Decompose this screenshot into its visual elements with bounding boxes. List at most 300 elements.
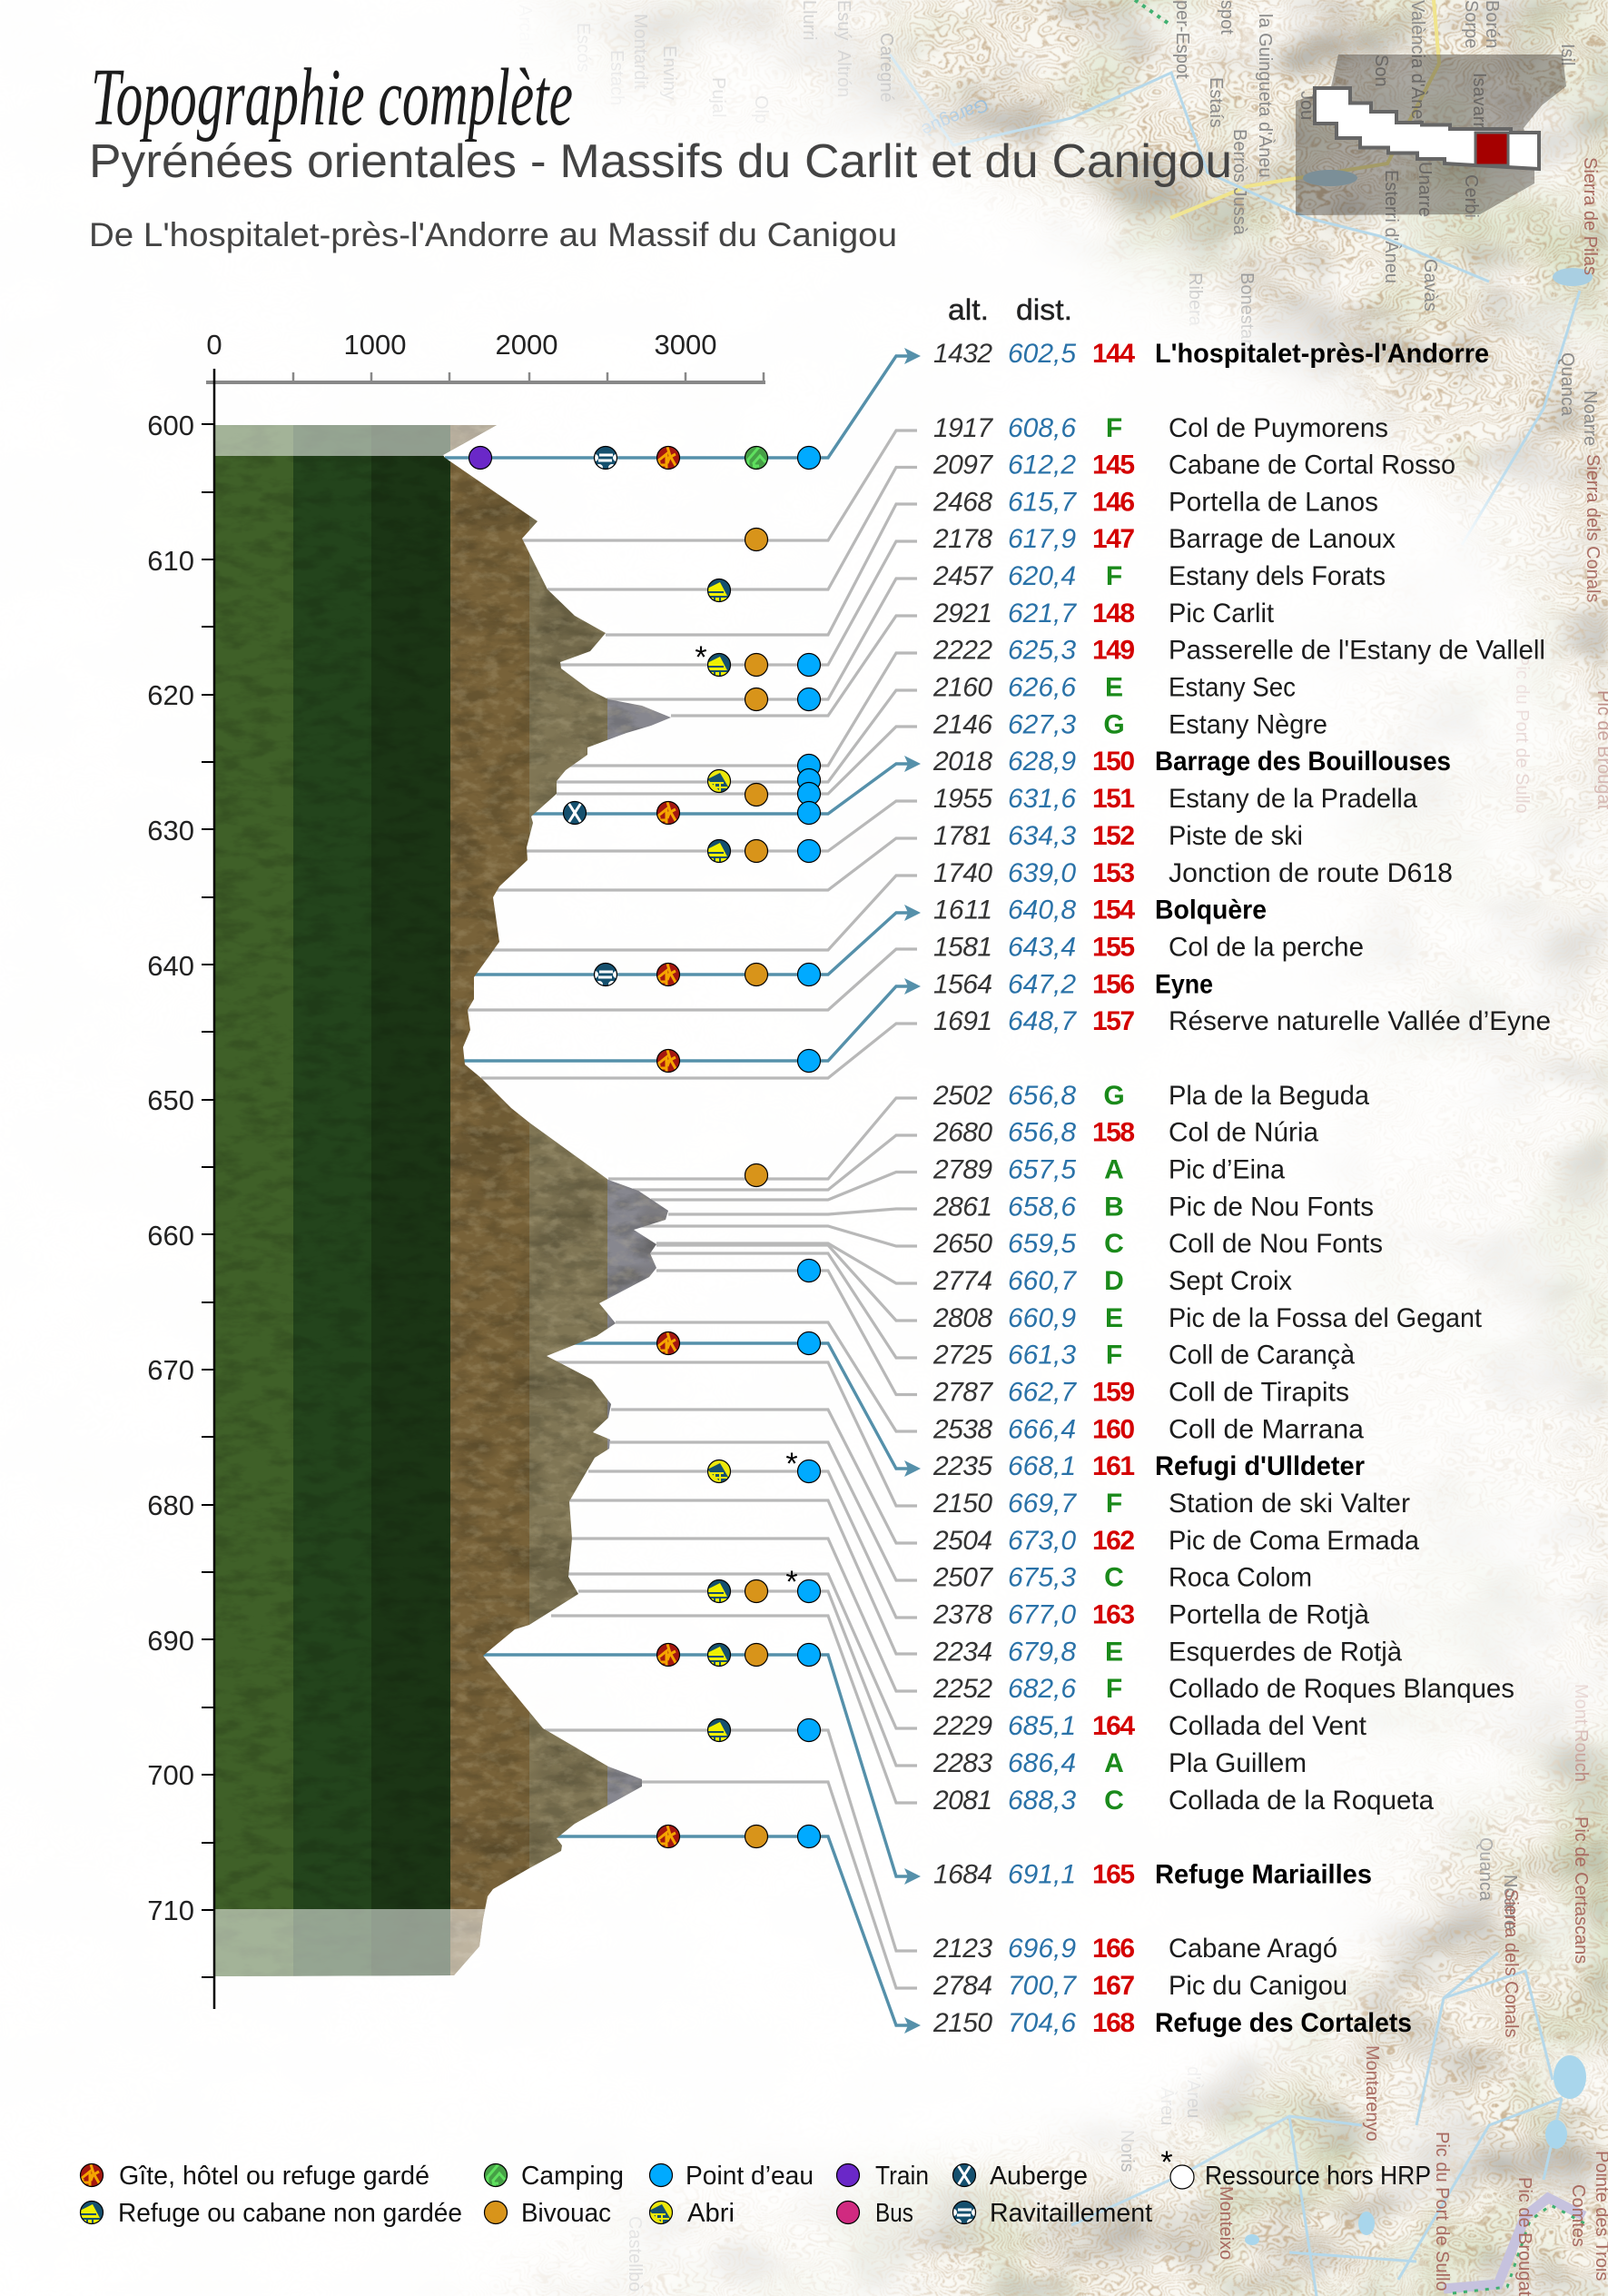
background topographic map: Borén [1482, 0, 1502, 48]
row: Cabane Aragó: 696,9 [1008, 1934, 1076, 1964]
resource icons on the profile lines [469, 447, 821, 1847]
row: Pic d'Eina: A [1104, 1155, 1124, 1184]
background topographic map: Monteixo [1216, 2186, 1236, 2260]
altitude axis [206, 329, 765, 382]
row: Pic de Coma Ermada: Pic de Coma Ermada [1169, 1526, 1419, 1556]
row: Portella de Rotjà: 2378 [932, 1600, 992, 1630]
row: L'hospitalet: 1432 [933, 339, 992, 369]
row: Coll de Carançà: F [1106, 1341, 1122, 1371]
row: Estany Nègre [932, 709, 1327, 739]
row: Col de la perche [933, 932, 1364, 962]
row: Refuge Mariailles: 691,1 [1008, 1859, 1076, 1889]
row: Piste de ski: 1781 [933, 821, 992, 851]
legend: train: Train [875, 2162, 929, 2191]
row: Collado de Roques Blanques: 682,6 [1008, 1674, 1076, 1704]
background topographic map: per-Espot [1172, 0, 1192, 79]
background topographic map: Caregné [876, 33, 896, 103]
background topographic map: Pic de Certascans [1571, 1816, 1591, 1964]
distance axis: 650 [147, 1084, 194, 1116]
row: Refuge des Cortalets: 704,6 [1008, 2008, 1076, 2038]
column headers: dist. [1016, 293, 1072, 326]
row: Coll de Marrana: 666,4 [1008, 1414, 1076, 1444]
row: Col de Puymorens [933, 413, 1388, 443]
distance axis: 680 [147, 1489, 194, 1521]
background topographic map: Escós [573, 23, 593, 72]
row: Bolquère: 154 [1092, 896, 1135, 925]
background topographic map: Esuý [834, 0, 853, 40]
row: Pla de la Beguda: Pla de la Beguda [1169, 1081, 1369, 1111]
row: Refuge Mariailles: 165 [1092, 1859, 1135, 1889]
row: Pic d'Eina: 657,5 [1008, 1155, 1076, 1184]
row: Roca Colom: 675,3 [1008, 1563, 1076, 1593]
row: Pic d'Eina: 2789 [932, 1155, 992, 1184]
row: Station de ski Valter: 2150 [932, 1489, 992, 1519]
row: Refugi d'Ulldeter [932, 1451, 1365, 1481]
row: Coll de Tirapits: 2787 [932, 1377, 993, 1408]
column headers [948, 293, 1072, 326]
section description: De L'hospitalet-près-l'Andorre au Massif du Canigou [89, 216, 897, 253]
row: Cabane de Cortal Rosso [932, 450, 1455, 480]
row: Coll de Nou Fonts [932, 1229, 1383, 1259]
row: Pla de la Beguda [932, 1081, 1369, 1111]
row: Coll de Carançà [932, 1341, 1355, 1371]
background topographic map: Noarre [1580, 391, 1600, 446]
row: Pic de la Fossa del Gegant: 660,9 [1008, 1303, 1076, 1333]
row: Estany de la Pradella: 151 [1092, 784, 1135, 814]
row: Refuge Mariailles: 1684 [933, 1859, 992, 1889]
row: Roca Colom: 2507 [932, 1563, 993, 1593]
row: Collada del Vent: Collada del Vent [1169, 1711, 1367, 1741]
background topographic map: Àreu [1157, 2087, 1178, 2125]
row: Eyne: Eyne [1155, 969, 1213, 999]
row: Portella de Lanos [932, 487, 1378, 517]
row: Cabane Aragó: 2123 [932, 1934, 992, 1964]
row: Pic Carlit: 2921 [932, 599, 992, 628]
background topographic map: la Guingueta d'Àneu [1255, 14, 1276, 178]
row: Estany Sec: 626,6 [1008, 673, 1076, 703]
row: Jonction de route D618: 153 [1092, 858, 1135, 888]
row: Portella de Lanos: 615,7 [1008, 487, 1077, 517]
legend: abri [649, 2199, 735, 2228]
row: Réserve naturelle: 157 [1092, 1006, 1135, 1036]
row: Esquerdes de Rotjà: Esquerdes de Rotjà [1169, 1637, 1402, 1667]
row: Refuge des Cortalets: 168 [1092, 2008, 1135, 2038]
row: Réserve naturelle: 1691 [933, 1006, 992, 1036]
row: Estany de la Pradella [933, 784, 1417, 814]
row: Refugi d'Ulldeter: 668,1 [1008, 1451, 1076, 1481]
distance axis: 670 [147, 1354, 194, 1386]
background topographic map: Castellbò [625, 2216, 645, 2291]
row: Pic de la Fossa del Gegant: Pic de la Fossa del Gegant [1169, 1303, 1483, 1333]
distance axis: 640 [147, 950, 194, 982]
background topographic map: Pic du Port de Sullo [1512, 654, 1532, 814]
row: Pic de la Fossa del Gegant: E [1105, 1303, 1123, 1333]
row: Pic Carlit: 148 [1092, 599, 1135, 628]
row: Pic de Nou Fonts: B [1104, 1192, 1124, 1222]
row: Roca Colom: Roca Colom [1169, 1563, 1312, 1593]
row: Pic d'Eina [932, 1155, 1285, 1184]
locator: route strip [1315, 88, 1539, 169]
row: Collado de Roques Blanques: F [1106, 1674, 1122, 1704]
subtitle: Pyrénées orientales - Massifs du Carlit et du Canigou [89, 135, 1232, 188]
legend: bus: Bus [875, 2199, 913, 2228]
row: Collada de la Roqueta: 2081 [932, 1786, 992, 1816]
row: Bolquère: 1611 [933, 896, 992, 925]
row: Barrage des Bouillouses: 150 [1092, 747, 1135, 777]
row: Refugi d'Ulldeter: Refugi d'Ulldeter [1155, 1451, 1365, 1481]
row: Cabane Aragó: 166 [1092, 1934, 1135, 1964]
row: Col de la perche: 1581 [933, 932, 992, 962]
row: Col de Puymorens: Col de Puymorens [1169, 413, 1388, 443]
row: Jonction de route D618: 1740 [933, 858, 992, 888]
row: Sept Croix: Sept Croix [1169, 1266, 1292, 1296]
altitude axis: 1000 [344, 329, 406, 361]
background topographic map: Estach [607, 50, 626, 105]
distance axis: 710 [147, 1895, 194, 1926]
title: Topographie complète [91, 53, 573, 143]
row: Esquerdes de Rotjà: 679,8 [1008, 1637, 1076, 1667]
row: Coll de Tirapits [932, 1377, 1349, 1408]
row: Pla Guillem [932, 1748, 1307, 1778]
legend: bivouac [485, 2199, 611, 2228]
row: Estany Sec: Estany Sec [1169, 673, 1296, 703]
row: Sept Croix: 2774 [932, 1266, 992, 1296]
elevation profile [214, 418, 695, 1989]
row: Bolquère: Bolquère [1155, 896, 1267, 925]
row: Roca Colom: C [1104, 1563, 1124, 1593]
background topographic map: Berròs Jussà [1229, 129, 1249, 236]
row: Refuge Mariailles: Refuge Mariailles [1155, 1859, 1372, 1889]
row: Pic de la Fossa del Gegant [932, 1303, 1483, 1333]
row: Collada del Vent: 164 [1092, 1711, 1135, 1741]
row: Estany Nègre: 627,3 [1008, 709, 1076, 739]
row: Portella de Rotjà [932, 1600, 1369, 1630]
row: Portella de Lanos: 2468 [932, 487, 992, 517]
row: Pla de la Beguda: 656,8 [1008, 1081, 1076, 1111]
background topographic map [496, 0, 1608, 2296]
row: Réserve naturelle: 648,7 [1008, 1006, 1077, 1036]
row: Pla de la Beguda: 2502 [932, 1081, 992, 1111]
row: Piste de ski: 634,3 [1008, 821, 1076, 851]
row: Pla Guillem: 686,4 [1008, 1748, 1076, 1778]
row: Cabane Aragó [932, 1934, 1337, 1964]
row: Collada de la Roqueta: Collada de la Roqueta [1169, 1786, 1434, 1816]
row: Pla Guillem: 2283 [932, 1748, 992, 1778]
row: Col de Puymorens: 1917 [933, 413, 993, 443]
row: Station de ski Valter [932, 1489, 1410, 1519]
legend: ressource hors HRP: * [1160, 2145, 1173, 2180]
background topographic map: Sorpe [1461, 0, 1481, 48]
waypoint table [932, 339, 1551, 2038]
row: Portella de Rotjà: 163 [1092, 1600, 1135, 1630]
row: Piste de ski [933, 821, 1303, 851]
background topographic map: Cerbi [1461, 174, 1481, 218]
row: Coll de Nou Fonts: 2650 [932, 1229, 992, 1259]
row: Collada de la Roqueta: 688,3 [1008, 1786, 1076, 1816]
row: Passerelle [932, 636, 1545, 666]
background topographic map: Quanca [1557, 352, 1577, 417]
row: Portella de Lanos: 146 [1092, 487, 1135, 517]
row: Eyne [933, 969, 1213, 999]
row: Sept Croix: 660,7 [1008, 1266, 1077, 1296]
background topographic map: Olp [751, 95, 771, 124]
legend: auberge: Auberge [990, 2162, 1088, 2191]
distance axis: 700 [147, 1759, 194, 1791]
row: Estany dels Forats: 620,4 [1008, 561, 1076, 591]
background topographic map: Isavarre [1469, 73, 1489, 138]
row: L'hospitalet: L'hospitalet-près-l'Andorre [1155, 339, 1489, 369]
row: Portella de Lanos: Portella de Lanos [1169, 487, 1378, 517]
background topographic map: Sierra dels Conals [1583, 454, 1603, 602]
legend: ressource hors HRP: Ressource hors HRP [1205, 2162, 1431, 2191]
legend: abri: Abri [687, 2199, 735, 2228]
distance axis: 610 [147, 545, 194, 577]
row: Pic de Nou Fonts: 2861 [932, 1192, 992, 1222]
row: Pic du Canigou [932, 1971, 1347, 2001]
background topographic map: Noarre [1500, 1875, 1520, 1930]
row: Collado de Roques Blanques [932, 1674, 1514, 1704]
row: Pic de Nou Fonts: 658,6 [1008, 1192, 1076, 1222]
row: Eyne: 1564 [933, 969, 992, 999]
legend: train [837, 2162, 929, 2191]
row: Passerelle: Passerelle de l'Estany de Vallell [1169, 636, 1545, 666]
row: Collado de Roques Blanques: Collado de Roques Blanques [1169, 1674, 1514, 1704]
row: Pic Carlit: Pic Carlit [1169, 599, 1275, 628]
row: Pic du Canigou: 167 [1092, 1971, 1135, 2001]
row: Coll de Marrana: Coll de Marrana [1169, 1414, 1364, 1444]
row: Refuge des Cortalets: Refuge des Cortalets [1155, 2008, 1412, 2038]
row: Collado de Roques Blanques: 2252 [932, 1674, 992, 1704]
row: Col de Núria: 656,8 [1008, 1118, 1076, 1148]
row: Estany dels Forats [932, 561, 1386, 591]
row: Jonction de route D618 [933, 858, 1453, 888]
row: Sept Croix [932, 1266, 1292, 1296]
row: Bolquère [933, 896, 1267, 925]
row: Pic de Coma Ermada: 162 [1092, 1526, 1135, 1556]
row: Col de Puymorens: 608,6 [1008, 413, 1076, 443]
row: Coll de Tirapits: Coll de Tirapits [1169, 1377, 1349, 1408]
distance axis: 600 [147, 410, 194, 441]
row: Passerelle: 149 [1092, 636, 1135, 666]
row: Barrage de Lanoux [932, 524, 1396, 554]
row: Esquerdes de Rotjà [932, 1637, 1402, 1667]
background topographic map: Isil [1557, 44, 1577, 65]
resource icons on the profile lines: * [785, 1447, 798, 1481]
background topographic map: Sierra dels Conals [1501, 1889, 1521, 2037]
background topographic map: Bonestarre [1237, 272, 1257, 361]
background topographic map: Unarre [1415, 162, 1435, 217]
row: Eyne: 156 [1092, 969, 1135, 999]
background topographic map: Altrón [834, 50, 853, 97]
row: Col de la perche: 643,4 [1008, 932, 1076, 962]
background topographic map: Son [1371, 54, 1391, 87]
row: Portella de Rotjà: Portella de Rotjà [1169, 1600, 1369, 1630]
legend: refuge: Refuge ou cabane non gardée [118, 2199, 462, 2228]
row: Cabane de Cortal Rosso: 145 [1092, 450, 1135, 480]
row: Pic Carlit [932, 599, 1275, 628]
row: Esquerdes de Rotjà: 2234 [932, 1637, 992, 1667]
row: Estany de la Pradella: Estany de la Pradella [1169, 784, 1417, 814]
background topographic map: Mont Rouch [1571, 1684, 1591, 1782]
distance axis [147, 369, 214, 2009]
row: Pic de Coma Ermada: 673,0 [1008, 1526, 1076, 1556]
resource icons on the profile lines: * [695, 640, 707, 675]
background topographic map: Montarenyo [1362, 2045, 1382, 2142]
distance axis: 690 [147, 1625, 194, 1657]
row: Bolquère: 640,8 [1008, 896, 1076, 925]
row: Pic de Coma Ermada: 2504 [932, 1526, 992, 1556]
row: L'hospitalet: 602,5 [1008, 339, 1076, 369]
row: Col de Núria: 158 [1092, 1118, 1135, 1148]
background topographic map: spot [1217, 0, 1237, 35]
row: Cabane de Cortal Rosso: 2097 [932, 450, 993, 480]
row: Pla de la Beguda: G [1103, 1081, 1125, 1111]
background topographic map: Estaís [1206, 77, 1226, 128]
background topographic map: d'Àreu [1183, 2066, 1204, 2118]
row: Refuge Mariailles [933, 1859, 1372, 1889]
background topographic map: Montardit [630, 14, 650, 90]
row: Roca Colom [932, 1563, 1312, 1593]
row: Coll de Tirapits: 662,7 [1008, 1377, 1077, 1408]
row: Barrage des Bouillouses: 628,9 [1008, 747, 1076, 777]
background topographic map: Quanca [1475, 1837, 1495, 1902]
column headers: alt. [948, 293, 989, 326]
row: Estany de la Pradella: 1955 [933, 784, 992, 814]
background topographic map: Arcalís [515, 5, 535, 60]
row: Pic de la Fossa del Gegant: 2808 [932, 1303, 992, 1333]
background topographic map: Pic de Brougat [1514, 2177, 1534, 2296]
background topographic map: Esterri d'Àneu [1381, 170, 1402, 283]
background topographic map: Ribera [1185, 272, 1205, 327]
row: Station de ski Valter: Station de ski Valter [1169, 1489, 1410, 1519]
locator inset map [1296, 54, 1566, 215]
row: Refuge des Cortalets [932, 2008, 1412, 2038]
background topographic map: Noris [1117, 2130, 1137, 2172]
altitude axis: 3000 [655, 329, 716, 361]
background topographic map: Enviny [659, 45, 679, 100]
row: Barrage des Bouillouses: 2018 [932, 747, 992, 777]
connector arrows: blue [445, 356, 908, 2025]
background topographic map: Comtes [1568, 2184, 1588, 2247]
background topographic map: Jou [1297, 91, 1317, 120]
legend: bivouac: Bivouac [521, 2199, 611, 2228]
row: Coll de Carançà: Coll de Carançà [1169, 1341, 1355, 1371]
legend: bus [837, 2199, 913, 2228]
row: Réserve naturelle: Réserve naturelle Vallée d’Eyne [1169, 1006, 1551, 1036]
row: Pic du Canigou: Pic du Canigou [1169, 1971, 1347, 2001]
row: Station de ski Valter: 669,7 [1008, 1489, 1077, 1519]
row: Refuge des Cortalets: 2150 [932, 2008, 992, 2038]
row: Estany Nègre: Estany Nègre [1169, 709, 1327, 739]
row: Eyne: 647,2 [1008, 969, 1076, 999]
row: Collada del Vent: 685,1 [1008, 1711, 1076, 1741]
background topographic map: Pic du Port de Sullo [1432, 2132, 1452, 2291]
row: Estany Nègre: G [1103, 709, 1125, 739]
row: Barrage des Bouillouses [932, 747, 1451, 777]
row: Pic de Nou Fonts [932, 1192, 1374, 1222]
row: Esquerdes de Rotjà: E [1105, 1637, 1123, 1667]
background topographic map: Gavàs [1420, 259, 1440, 312]
row: Jonction de route D618: 639,0 [1008, 858, 1076, 888]
background topographic map: Llurri [799, 0, 819, 40]
distance axis: 620 [147, 679, 194, 711]
row: Coll de Marrana: 2538 [932, 1414, 992, 1444]
row: Estany de la Pradella: 631,6 [1008, 784, 1076, 814]
row: Coll de Carançà: 2725 [932, 1341, 992, 1371]
row: Passerelle: 625,3 [1008, 636, 1076, 666]
legend: gîte: Gîte, hôtel ou refuge gardé [119, 2162, 429, 2191]
row: Estany dels Forats: F [1106, 561, 1122, 591]
row: Estany Sec [932, 673, 1296, 703]
resource icons on the profile lines: * [785, 1565, 798, 1599]
row: Refugi d'Ulldeter: 2235 [932, 1451, 992, 1481]
row: Jonction de route D618: Jonction de route D618 [1169, 858, 1453, 888]
row: Pic d'Eina: Pic d’Eina [1169, 1155, 1285, 1184]
row: Pic de Coma Ermada [932, 1526, 1419, 1556]
row: Col de la perche: Col de la perche [1169, 932, 1364, 962]
legend [80, 2145, 1431, 2228]
row: Col de la perche: 155 [1092, 932, 1135, 962]
row: Piste de ski: Piste de ski [1169, 821, 1303, 851]
row: Col de Núria [932, 1118, 1318, 1148]
row: Réserve naturelle [933, 1006, 1551, 1036]
locator: current section [1475, 133, 1508, 165]
row: Portella de Rotjà: 677,0 [1008, 1600, 1076, 1630]
legend: ravitaillement: Ravitaillement [990, 2199, 1152, 2228]
row: Cabane de Cortal Rosso: 612,2 [1008, 450, 1076, 480]
row: L'hospitalet: 144 [1092, 339, 1135, 369]
row: Passerelle: 2222 [932, 636, 992, 666]
background topographic map: València d'Àneu [1407, 0, 1428, 129]
row: Estany Sec: 2160 [932, 673, 992, 703]
legend: ressource hors HRP [1160, 2145, 1431, 2191]
row: Cabane de Cortal Rosso: Cabane de Cortal Rosso [1169, 450, 1455, 480]
row: Pla Guillem: Pla Guillem [1169, 1748, 1307, 1778]
row: Barrage de Lanoux: 617,9 [1008, 524, 1076, 554]
row: Col de Núria: 2680 [932, 1118, 992, 1148]
legend: point d'eau: Point d’eau [686, 2162, 814, 2191]
row: Pic de Nou Fonts: Pic de Nou Fonts [1169, 1192, 1374, 1222]
row: Collada de la Roqueta: C [1104, 1786, 1124, 1816]
row: L'hospitalet [933, 339, 1489, 369]
altitude axis: 0 [206, 329, 222, 361]
altitude axis: 2000 [496, 329, 557, 361]
row: Estany Sec: E [1105, 673, 1123, 703]
row: Station de ski Valter: F [1106, 1489, 1122, 1519]
row: Coll de Marrana [932, 1414, 1364, 1444]
row: Coll de Nou Fonts: C [1104, 1229, 1124, 1259]
distance axis: 630 [147, 815, 194, 846]
row: Refugi d'Ulldeter: 161 [1092, 1451, 1135, 1481]
row: Coll de Nou Fonts: Coll de Nou Fonts [1169, 1229, 1383, 1259]
background topographic map: Sierra de Pilas [1580, 157, 1600, 275]
row: Col de Puymorens: F [1106, 413, 1122, 443]
row: Coll de Carançà: 661,3 [1008, 1341, 1076, 1371]
row: Coll de Nou Fonts: 659,5 [1008, 1229, 1076, 1259]
legend: camping: Camping [521, 2162, 624, 2191]
row: Piste de ski: 152 [1092, 821, 1135, 851]
row: Barrage de Lanoux: Barrage de Lanoux [1169, 524, 1396, 554]
row: Cabane Aragó: Cabane Aragó [1169, 1934, 1337, 1964]
row: Barrage de Lanoux: 2178 [932, 524, 992, 554]
background topographic map: Gareguè [918, 94, 991, 140]
row: Collada de la Roqueta [932, 1786, 1434, 1816]
row: Estany dels Forats: Estany dels Forats [1169, 561, 1386, 591]
distance axis: 660 [147, 1220, 194, 1252]
row: Collada del Vent [932, 1711, 1367, 1741]
row: Estany Nègre: 2146 [932, 709, 992, 739]
row: Barrage de Lanoux: 147 [1092, 524, 1135, 554]
